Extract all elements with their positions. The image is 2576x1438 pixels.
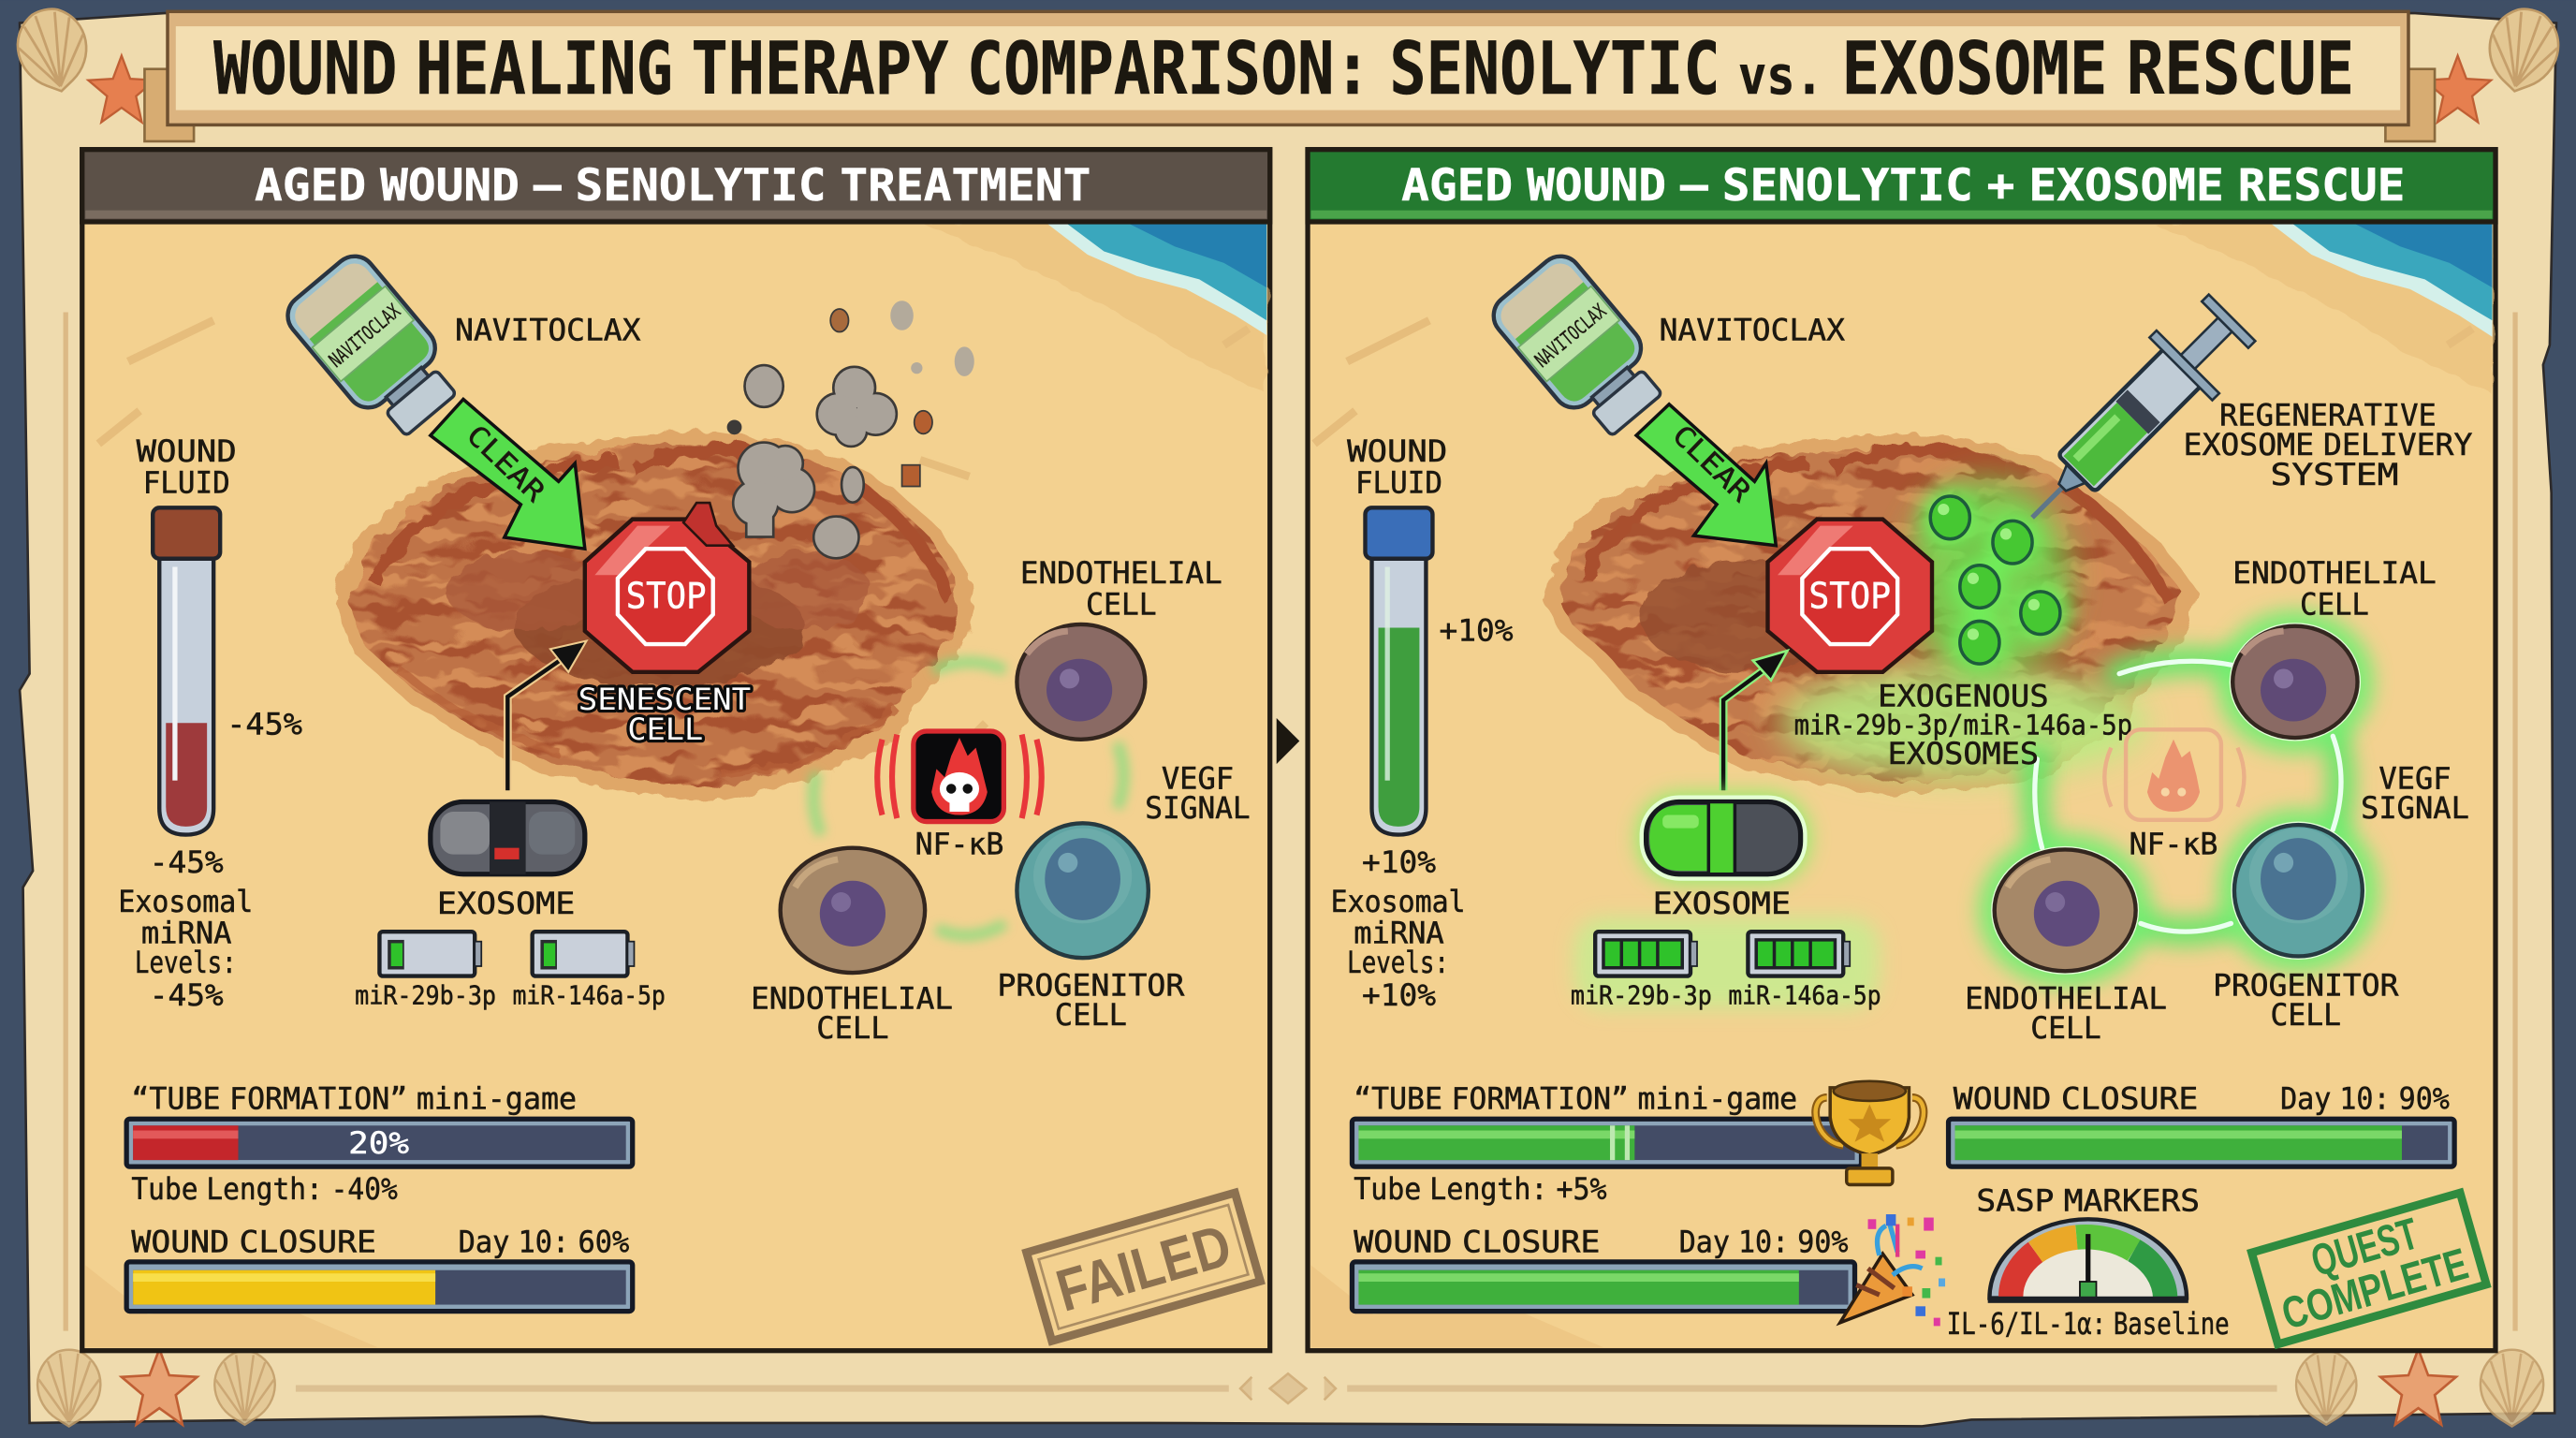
tube: wound fluid [1365, 507, 1432, 835]
stop sign: senescent cell: STOP [1808, 575, 1891, 617]
label: regenerative exosome delivery system: SYSTEM [2271, 459, 2398, 492]
icon: shell bottom-left [37, 1350, 100, 1427]
stop sign: senescent cell: STOP [626, 575, 707, 617]
panel: senolytic treatment [82, 150, 1270, 1351]
vial: navitoclax: NAVITOCLAX [324, 299, 404, 372]
panel sand background [82, 150, 1270, 1351]
label: exosomal mirna levels: +10% [1362, 846, 1436, 880]
icon: starfish bottom-left [122, 1349, 198, 1425]
label: tube length: Tube Length: +5% [1354, 1173, 1606, 1207]
vial: navitoclax [279, 247, 470, 448]
icon: starfish bottom-right [2380, 1349, 2456, 1425]
cell: endothelial lower [781, 848, 925, 973]
label: exosomal mirna levels: -45% [150, 846, 224, 880]
label: wound closure: WOUND CLOSURE [1354, 1225, 1600, 1259]
label: wound fluid: WOUND [1347, 435, 1447, 469]
label: wound fluid [1347, 435, 1447, 501]
label: tube level: +10% [1439, 615, 1513, 649]
arrow: clear [1636, 404, 1776, 546]
label: regenerative exosome delivery system: EXOSOME DELIVERY [2184, 429, 2472, 462]
battery: miR-29b-3p full [1595, 932, 1697, 976]
arrow: clear [431, 400, 585, 549]
exogenous exosome particles [1930, 496, 2060, 664]
label: exosomal mirna levels [1331, 846, 1466, 1013]
stamp: quest complete: QUEST [2305, 1209, 2423, 1286]
right panel header [1308, 150, 2496, 222]
wound [1544, 433, 2198, 795]
left panel header [82, 150, 1270, 222]
label: exogenous exosomes [1794, 681, 2132, 771]
label: endothelial lower: ENDOTHELIAL [751, 983, 953, 1017]
label: vegf signal [1145, 762, 1251, 826]
bar: wound closure top right [1949, 1119, 2454, 1167]
label: wound closure: WOUND CLOSURE [131, 1225, 376, 1259]
label: progenitor [2213, 970, 2399, 1033]
cell: progenitor [1017, 823, 1149, 958]
label: progenitor: PROGENITOR [2213, 970, 2399, 1004]
battery: miR-146a-5p low [533, 932, 634, 976]
label: wound closure [1354, 1225, 1848, 1259]
label: endothelial top: CELL [2300, 588, 2369, 622]
label: endothelial top [2232, 557, 2437, 622]
glow around exosome and batteries [1573, 792, 1880, 1009]
label: exosomal mirna levels: miRNA [141, 917, 231, 950]
label: wound closure: Day 10: 60% [459, 1225, 629, 1259]
label: il-6 il-1a baseline: IL-6/IL-1α: Baseline [1947, 1308, 2230, 1342]
icon: shell bottom-left second [214, 1351, 275, 1425]
label: mirna names: miR-29b-3p [1571, 981, 1712, 1010]
label: progenitor [997, 970, 1185, 1033]
label: wound fluid [137, 435, 237, 501]
label: endothelial top: ENDOTHELIAL [2232, 557, 2437, 591]
label: vegf signal: VEGF [2378, 762, 2452, 796]
icon: shell top-right [2481, 3, 2565, 98]
battery: miR-146a-5p full [1748, 932, 1850, 976]
title text: vs. [1738, 46, 1823, 107]
cell: progenitor [2231, 822, 2365, 960]
label: wound closure top right: Day 10: 90% [2280, 1083, 2450, 1117]
right panel header: AGED WOUND – SENOLYTIC + EXOSOME RESCUE [1401, 160, 2405, 212]
icon: trophy [1816, 1081, 1924, 1184]
label: endothelial lower [1965, 983, 2167, 1046]
label: regenerative exosome delivery system: REGENERATIVE [2219, 400, 2437, 433]
icon: shell bottom-right second [2481, 1350, 2543, 1427]
icon: shell top-left [11, 3, 95, 98]
bar: wound closure 60% [126, 1262, 633, 1312]
bar: wound closure 90% [1352, 1262, 1855, 1312]
label: endothelial top [1020, 557, 1222, 622]
syringe: exosome delivery [2001, 286, 2263, 549]
label: navitoclax: NAVITOCLAX [455, 314, 640, 347]
wound [333, 431, 973, 802]
label: exosomal mirna levels: Exosomal [118, 886, 253, 919]
title text: EXOSOME RESCUE [1841, 27, 2354, 111]
label: progenitor: CELL [1055, 999, 1127, 1033]
arrow: clear: CLEAR [1665, 418, 1757, 508]
label: progenitor: PROGENITOR [997, 970, 1185, 1004]
label: exosome: EXOSOME [437, 888, 575, 921]
label: regenerative exosome delivery system [2184, 400, 2472, 492]
panel sand background [1308, 150, 2496, 1351]
vial: navitoclax: NAVITOCLAX [1530, 299, 1611, 372]
label: vegf signal: VEGF [1162, 762, 1234, 796]
title text: WOUND HEALING THERAPY COMPARISON: SENOLYTIC [213, 27, 1720, 111]
bar: tube formation [1352, 1119, 1862, 1167]
label: senescent cell [578, 683, 751, 747]
label: tube level: -45% [227, 709, 302, 742]
label: vegf signal: SIGNAL [1145, 792, 1251, 826]
label: progenitor: CELL [2271, 999, 2341, 1033]
icon: nf-kb skull alert [877, 731, 1042, 822]
label: endothelial lower: ENDOTHELIAL [1965, 983, 2167, 1017]
label: navitoclax: NAVITOCLAX [1660, 314, 1845, 347]
label: mirna names [355, 981, 666, 1010]
label: nf-kb: NF-κB [2130, 829, 2217, 862]
icon: party popper [1840, 1214, 1945, 1326]
gauge: sasp markers [1988, 1219, 2188, 1303]
label: exogenous exosomes: EXOGENOUS [1878, 681, 2049, 714]
vial: navitoclax [1485, 247, 1676, 448]
label: senescent cell: CELL [627, 713, 703, 747]
smoke and debris [729, 301, 974, 557]
stop sign: senescent cell [585, 503, 749, 672]
label: exosomal mirna levels: -45% [150, 979, 224, 1013]
bar: tube formation 20%: 20% [348, 1127, 409, 1161]
label: tube formation: “TUBE FORMATION” mini-game [1354, 1083, 1797, 1117]
label: exosomal mirna levels: Levels: [1347, 946, 1449, 980]
icon: nf-kb faded [2104, 729, 2244, 820]
label: exosomal mirna levels: Levels: [135, 946, 237, 980]
stamp: quest complete [2251, 1193, 2486, 1344]
label: wound fluid: WOUND [137, 435, 237, 469]
label: vegf signal [2361, 762, 2469, 826]
icon: centre arrow between panels [1277, 718, 1299, 764]
label: sasp markers: SASP MARKERS [1976, 1185, 2200, 1219]
battery: miR-29b-3p low [379, 932, 481, 976]
label: exogenous exosomes: miR-29b-3p/miR-146a-5p [1794, 710, 2132, 741]
label: exosomal mirna levels: +10% [1362, 979, 1436, 1013]
cell: endothelial lower [1991, 846, 2139, 975]
stop sign: senescent cell [1767, 520, 1932, 672]
icon: starfish top-right [2424, 55, 2491, 123]
cell: endothelial top [2230, 623, 2361, 741]
arrow: exosome to senescent cell [507, 641, 587, 790]
ocean corner [2269, 222, 2492, 337]
ocean corner [1045, 222, 1266, 335]
label: endothelial lower [751, 983, 953, 1046]
exosome and text glow [1779, 480, 2147, 779]
label: exogenous exosomes: EXOSOMES [1888, 738, 2039, 771]
network glow [1978, 609, 2378, 988]
tube: wound fluid [153, 507, 220, 835]
label: exosome: EXOSOME [1653, 888, 1791, 921]
label: wound closure top right [1954, 1083, 2450, 1117]
label: endothelial lower: CELL [2030, 1012, 2101, 1046]
cell: endothelial top [1017, 624, 1145, 740]
label: senescent cell: SENESCENT [578, 683, 751, 717]
left panel header: AGED WOUND – SENOLYTIC TREATMENT [255, 160, 1090, 212]
label: wound fluid: FLUID [143, 467, 230, 501]
label: wound closure: Day 10: 90% [1679, 1225, 1848, 1259]
label: tube formation: “TUBE FORMATION” mini-game [131, 1083, 577, 1117]
label: mirna names: miR-146a-5p [513, 981, 666, 1010]
label: exosomal mirna levels [118, 846, 253, 1013]
exosome capsule depleted [431, 802, 585, 874]
arrow: exosome to senescent cell [1723, 651, 1788, 790]
label: vegf signal: SIGNAL [2361, 792, 2469, 826]
icon: shell bottom-right first [2296, 1351, 2356, 1425]
label: exosomal mirna levels: Exosomal [1331, 886, 1466, 919]
faint vegf signal links [813, 662, 1123, 935]
label: nf-kb: NF-κB [915, 829, 1003, 862]
label: wound closure [131, 1225, 629, 1259]
arrow: clear: CLEAR [460, 418, 551, 508]
label: endothelial top: ENDOTHELIAL [1020, 557, 1222, 591]
label: endothelial top: CELL [1086, 588, 1157, 622]
label: endothelial lower: CELL [816, 1012, 889, 1046]
icon: starfish top-left [88, 55, 154, 123]
panel: senolytic + exosome rescue [1308, 150, 2496, 1351]
label: mirna names: miR-146a-5p [1728, 981, 1881, 1010]
stamp: failed: FAILED [1049, 1212, 1238, 1325]
label: mirna names: miR-29b-3p [355, 981, 496, 1010]
label: wound closure top right: WOUND CLOSURE [1954, 1083, 2198, 1117]
bar: tube formation 20% [126, 1119, 633, 1167]
exosome capsule charged [1647, 802, 1801, 874]
label: wound fluid: FLUID [1355, 467, 1442, 501]
title banner [144, 11, 2435, 141]
label: tube length: Tube Length: -40% [131, 1173, 398, 1207]
label: mirna names [1571, 981, 1881, 1010]
stamp: quest complete: COMPLETE [2276, 1240, 2473, 1340]
label: exosomal mirna levels: miRNA [1354, 917, 1444, 950]
